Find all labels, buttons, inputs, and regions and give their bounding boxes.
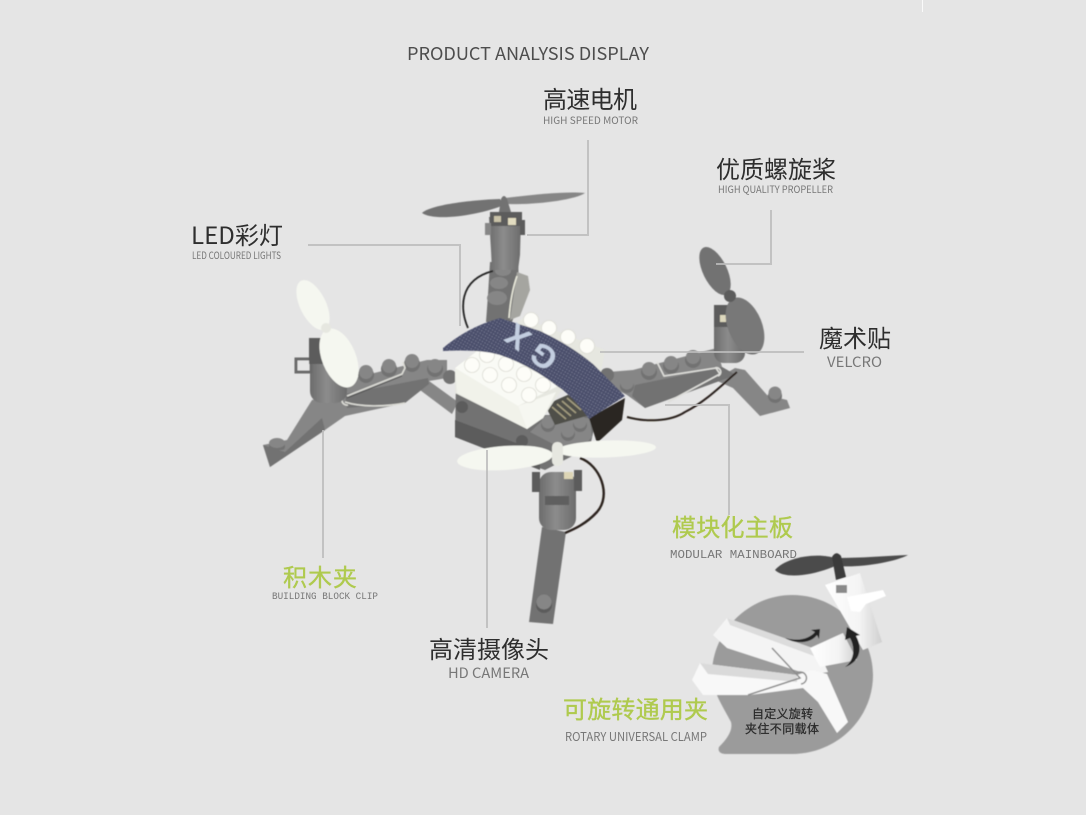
right arm, leg and motor — [600, 242, 790, 420]
clamp caption: 夹住不同载体 — [745, 720, 819, 737]
left motor and propeller — [289, 275, 366, 403]
label: rotary universal clamp: ROTARY UNIVERSAL CLAMP — [565, 728, 707, 745]
top arm and motor — [422, 192, 585, 322]
label: modular mainboard — [670, 508, 797, 562]
label: building block clip: BUILDING BLOCK CLIP — [272, 592, 378, 603]
strap: GX — [491, 311, 564, 378]
label: HD camera: HD CAMERA — [448, 663, 529, 683]
clamp caption — [745, 705, 819, 737]
leader line: mainboard — [665, 405, 729, 515]
left arm and leg — [263, 354, 458, 467]
label: rotary universal clamp — [563, 690, 708, 745]
clamp upper arm — [713, 618, 828, 675]
wire top — [463, 271, 493, 328]
leader line: velcro — [600, 351, 804, 353]
label: LED lights: LED彩灯 — [191, 216, 283, 251]
label: high speed motor: HIGH SPEED MOTOR — [543, 112, 639, 127]
rotating joint — [810, 633, 857, 667]
leader line: LED — [308, 245, 460, 326]
central body — [455, 380, 597, 470]
spring — [748, 648, 806, 695]
label: rotary universal clamp: 可旋转通用夹 — [563, 690, 708, 725]
white motor — [825, 573, 882, 650]
front motor and leg — [456, 439, 656, 624]
label: velcro: 魔术贴 — [819, 319, 891, 354]
rotation arrows — [785, 629, 820, 642]
white brick — [455, 312, 605, 429]
label: modular mainboard: 模块化主板 — [672, 508, 793, 543]
label: LED lights: LED COLOURED LIGHTS — [192, 247, 281, 262]
clamp lower arm and leg — [692, 663, 848, 733]
strap — [443, 311, 625, 443]
leader line: HD camera — [486, 450, 488, 628]
label: HD camera: 高清摄像头 — [429, 630, 549, 665]
title: PRODUCT ANALYSIS DISPLAY — [407, 40, 649, 66]
label: velcro — [819, 319, 891, 372]
leader line: propeller — [716, 210, 771, 264]
label: building block clip — [272, 558, 378, 603]
dark propeller — [775, 556, 835, 576]
clamp backdrop — [712, 595, 873, 754]
label: modular mainboard: MODULAR MAINBOARD — [670, 548, 797, 562]
label: velcro: VELCRO — [827, 352, 882, 372]
rotary clamp illustration — [692, 553, 908, 754]
label: building block clip: 积木夹 — [283, 558, 357, 593]
label: high quality propeller: HIGH QUALITY PROPELLER — [718, 181, 834, 196]
label: HD camera — [429, 630, 549, 683]
leader line: building block clip — [322, 430, 324, 558]
clamp caption: 自定义旋转 — [752, 705, 813, 722]
label: high quality propeller: 优质螺旋桨 — [716, 150, 836, 185]
drone product illustration — [263, 192, 790, 624]
decorative tick — [922, 0, 923, 12]
leader line: high speed motor — [527, 140, 588, 235]
label: high speed motor: 高速电机 — [543, 80, 637, 115]
